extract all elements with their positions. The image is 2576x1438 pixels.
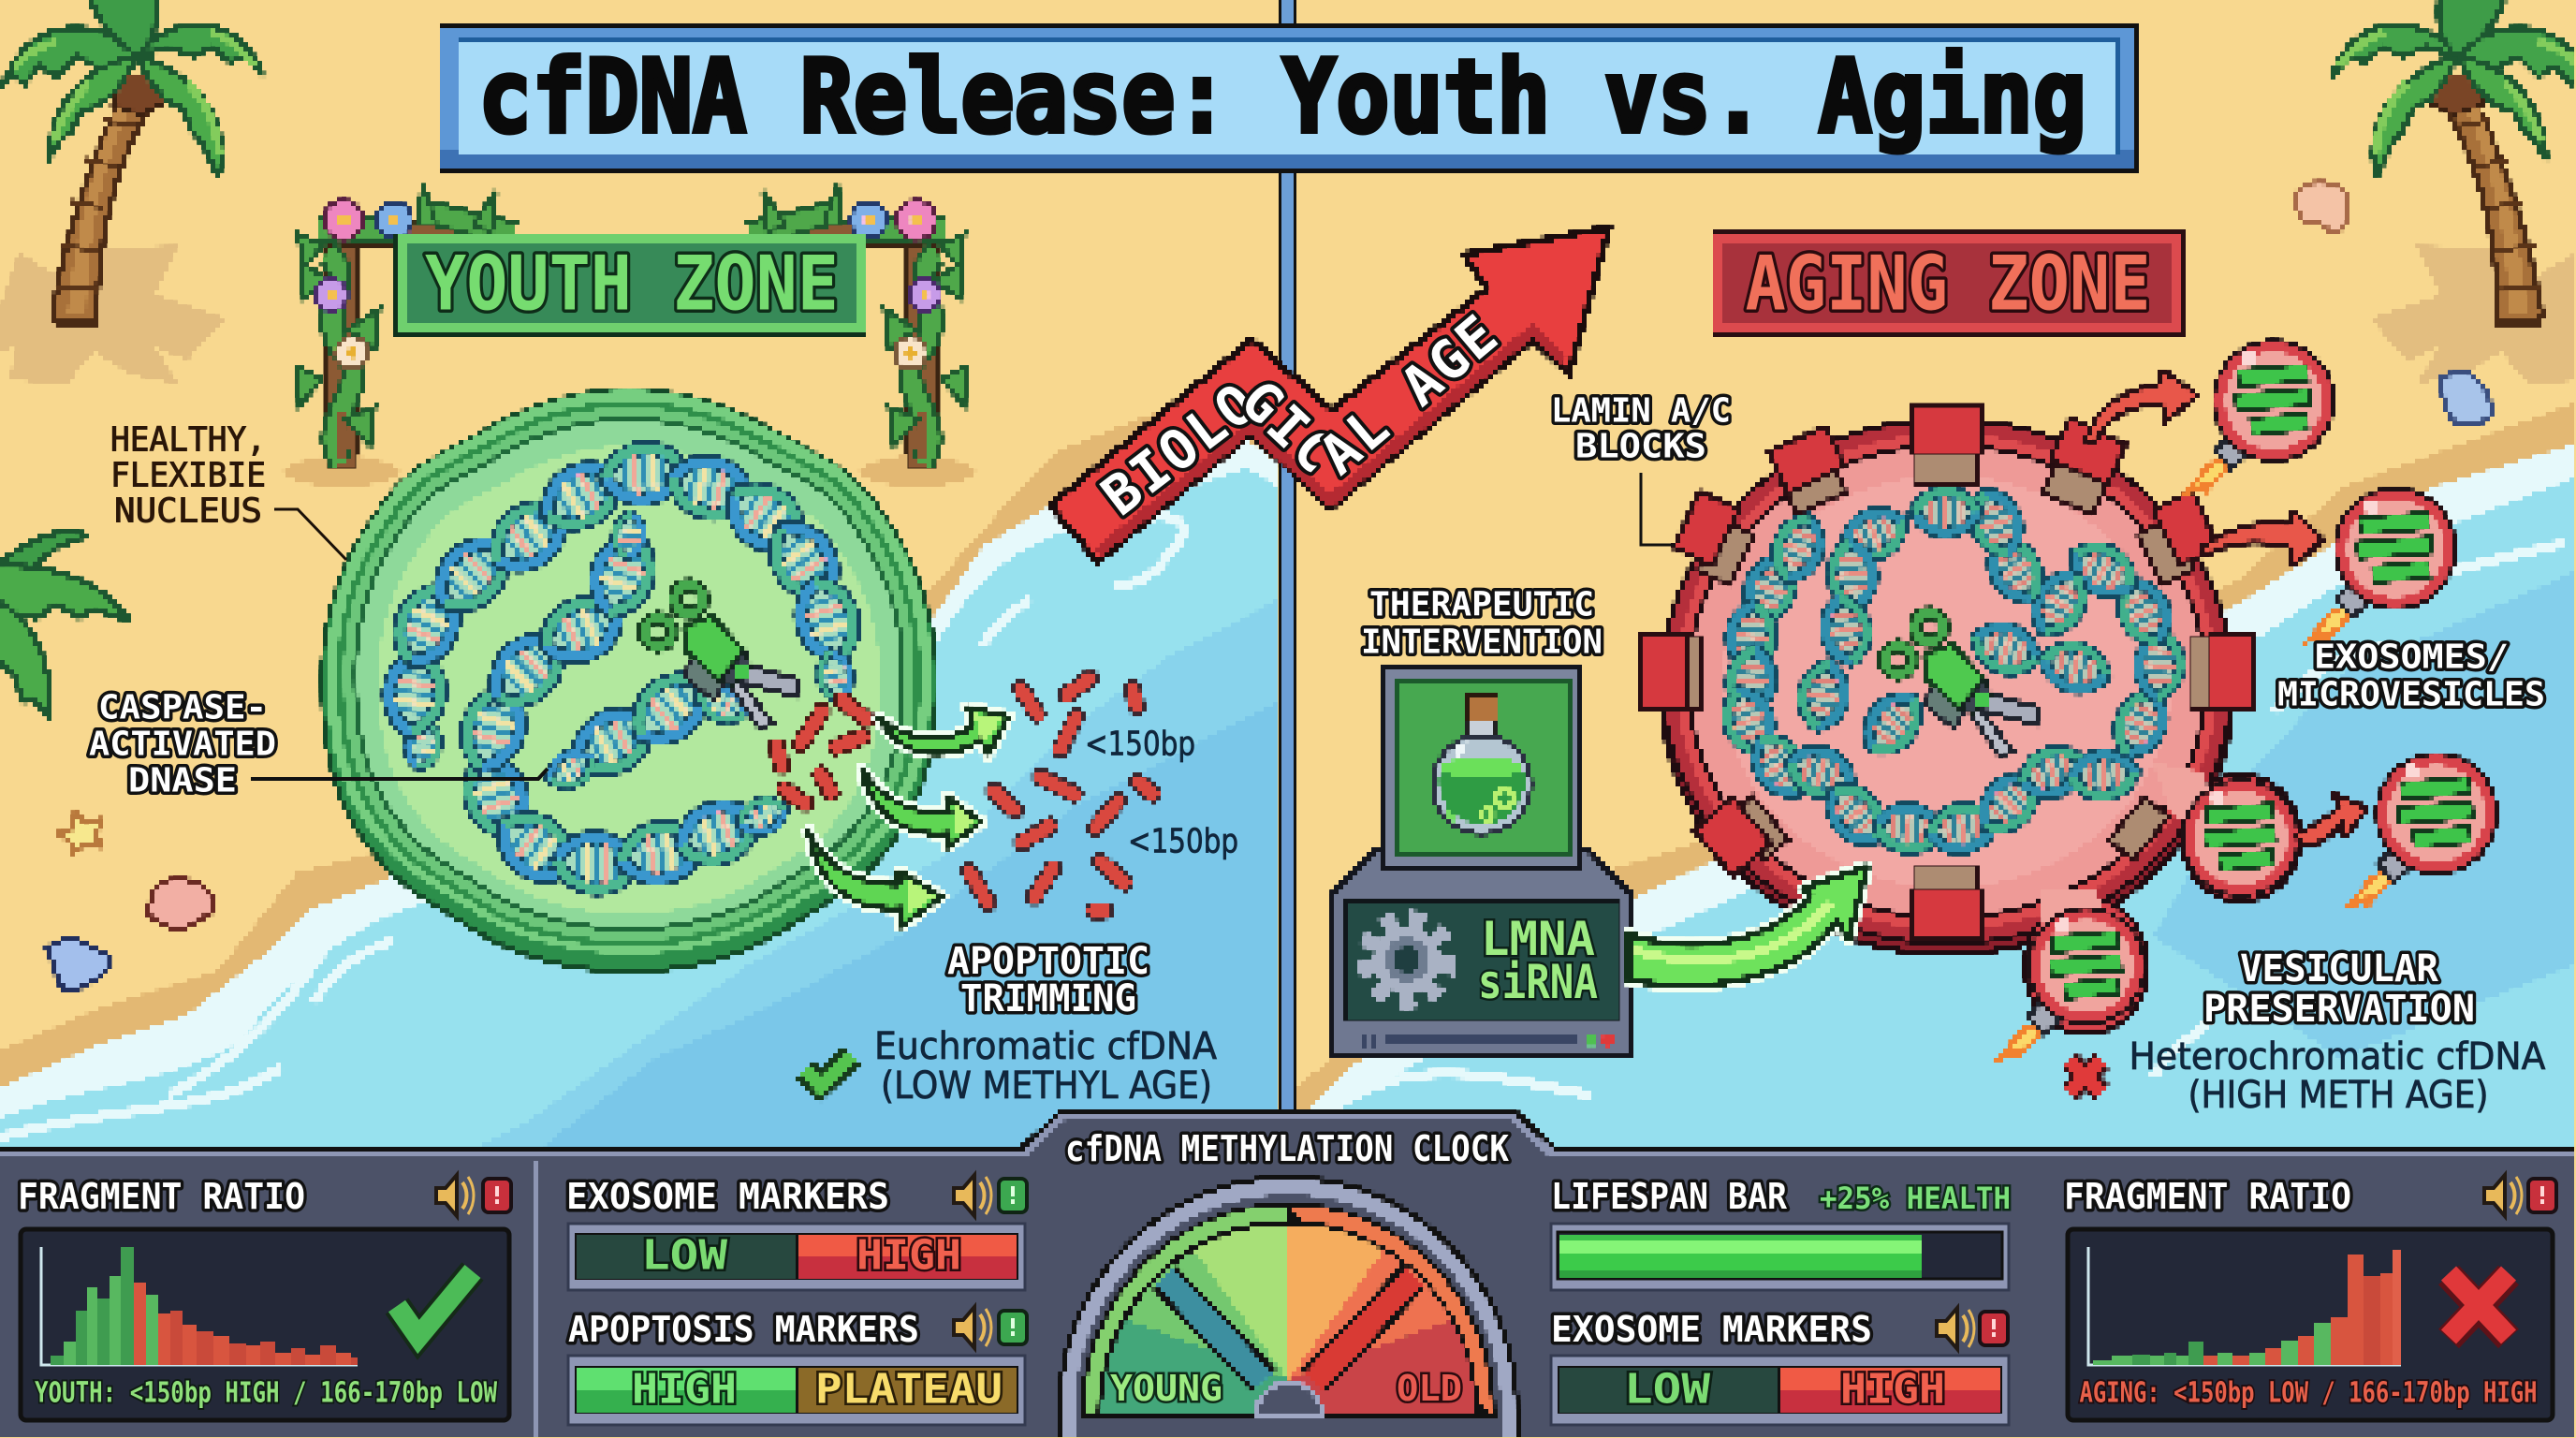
label: healthy flexible nucleus	[110, 421, 346, 560]
label: apoptotic trimming: TRIMMING	[960, 977, 1136, 1020]
right fragment ratio module	[2064, 1175, 2556, 1420]
exosome vesicle 1 with rocket flame	[2180, 339, 2335, 498]
label: therapeutic intervention	[1361, 586, 1603, 661]
dna fragments: inside nucleus	[777, 700, 866, 803]
vesicle in bud 2	[1993, 907, 2145, 1064]
arch: youth zone vines and flowers	[281, 185, 978, 487]
lmna sirna text: siRNA	[1478, 955, 1598, 1009]
shells: right beach	[2293, 183, 2491, 425]
sign: youth zone: YOUTH ZONE	[425, 240, 839, 328]
label: vesicular preservation: PRESERVATION	[2203, 988, 2475, 1031]
lmna sirna text	[1478, 912, 1598, 1009]
shells: left beach	[47, 813, 212, 990]
device: lmna sirna console	[1332, 668, 1632, 1055]
result: euchromatic cfdna	[874, 1025, 1218, 1108]
icon: red cross	[2071, 1061, 2102, 1093]
label: lamin a/c blocks: LAMIN A/C	[1551, 391, 1731, 431]
palm tree: top left	[0, 0, 262, 386]
left fragment ratio module: FRAGMENT RATIO	[18, 1176, 305, 1217]
youth histogram	[41, 1247, 358, 1365]
gauge old label: OLD	[1397, 1368, 1462, 1409]
vesicle in bud 1	[2182, 779, 2300, 897]
center divider	[1279, 0, 1296, 1153]
apoptosis markers module	[568, 1307, 1027, 1425]
label: lamin a/c blocks: BLOCKS	[1575, 427, 1706, 466]
label: caspase-activated dnase: ACTIVATED	[89, 725, 276, 764]
exosome vesicle 2 with rocket flame	[2302, 487, 2457, 646]
icon: green check	[805, 1055, 852, 1086]
palm tree: top right	[2333, 0, 2576, 386]
label: exosomes microvesicles: EXOSOMES/	[2314, 638, 2509, 676]
aging fragment screen	[2068, 1229, 2553, 1420]
sign: aging zone: AGING ZONE	[1745, 240, 2151, 328]
dna fragments: released	[969, 678, 1153, 911]
membrane ring	[1659, 419, 2235, 957]
gauge young label: YOUNG	[1110, 1368, 1222, 1409]
apoptosis markers module: PLATEAU	[815, 1365, 1003, 1414]
icon: cross	[2449, 1273, 2509, 1339]
label: caspase-activated dnase	[89, 689, 548, 800]
exosome markers module: youth: EXOSOME MARKERS	[566, 1176, 889, 1217]
result: euchromatic cfdna: Euchromatic cfDNA	[874, 1025, 1218, 1068]
result: heterochromatic cfdna: Heterochromatic cfDNA	[2129, 1035, 2546, 1078]
label: apoptotic trimming: APOPTOTIC	[947, 940, 1149, 983]
label: healthy flexible nucleus: HEALTHY,	[110, 421, 266, 459]
aging histogram	[2088, 1247, 2401, 1365]
lmna sirna text: LMNA	[1481, 912, 1595, 966]
label: healthy flexible nucleus: NUCLEUS	[114, 492, 262, 530]
result: heterochromatic cfdna	[2129, 1035, 2546, 1117]
gauge title: cfDNA METHYLATION CLOCK	[1065, 1128, 1509, 1169]
palm tree: mid left	[0, 533, 129, 718]
exosome markers module: youth: HIGH	[856, 1232, 961, 1279]
exosome markers module: youth	[566, 1175, 1027, 1290]
lamin blocks	[1642, 407, 2254, 938]
label: vesicular preservation	[2203, 947, 2475, 1031]
arrow: therapeutic effect	[1629, 866, 1867, 986]
label: healthy flexible nucleus: FLEXIBIE	[110, 457, 266, 494]
label: therapeutic intervention: INTERVENTION	[1361, 624, 1603, 661]
arrow: fragments released	[809, 707, 1008, 927]
title banner	[439, 24, 2137, 174]
label: exosomes microvesicles: MICROVESICLES	[2277, 676, 2545, 713]
label: caspase-activated dnase: CASPASE-	[98, 689, 267, 726]
lifespan bar module: LIFESPAN BAR	[1551, 1176, 1787, 1217]
dna strands: aging tangled	[1719, 487, 2182, 854]
label: exosomes microvesicles	[2277, 638, 2545, 713]
label: therapeutic intervention: THERAPEUTIC	[1369, 586, 1594, 624]
label: vesicular preservation: VESICULAR	[2240, 947, 2439, 990]
monitor: potion	[1383, 668, 1580, 870]
nucleus: aging with lamin blocks	[1642, 407, 2303, 1064]
exosome markers module: aging: HIGH	[1840, 1365, 1945, 1414]
nucleus: healthy youth	[320, 388, 938, 974]
apoptosis markers module: HIGH	[632, 1365, 737, 1414]
right fragment ratio module: FRAGMENT RATIO	[2064, 1176, 2351, 1217]
lifespan bar module	[1551, 1176, 2011, 1290]
icon: check	[397, 1271, 473, 1337]
exosome markers module: aging	[1551, 1308, 2009, 1425]
label: apoptotic trimming	[947, 940, 1149, 1020]
arrow: biological age	[1048, 225, 1614, 566]
panel: bottom dashboard	[0, 1110, 2576, 1438]
label: caspase-activated dnase: DNASE	[128, 762, 237, 800]
exosome markers module: aging: EXOSOME MARKERS	[1551, 1309, 1872, 1350]
youth fragment screen	[21, 1229, 509, 1420]
label: fragment size 2: <150bp	[1128, 822, 1238, 861]
youth caption: YOUTH: <150bp HIGH / 166-170bp LOW	[35, 1376, 498, 1410]
dna strands: youth	[386, 443, 864, 892]
exosome markers module: aging: LOW	[1624, 1365, 1711, 1414]
arrows: vesicle release	[2086, 370, 2367, 845]
result: euchromatic cfdna: (LOW METHYL AGE)	[881, 1064, 1212, 1108]
apoptosis markers module: APOPTOSIS MARKERS	[568, 1309, 919, 1350]
arrow: biological age: BIOLOGICAL AGE	[1095, 310, 1501, 520]
scissors: caspase-activated DNase	[644, 585, 798, 726]
membrane buds	[2023, 763, 2303, 1036]
label: lamin a/c blocks	[1551, 391, 1731, 545]
exosome markers module: youth: LOW	[641, 1232, 728, 1279]
title text: cfDNA Release: Youth vs. Aging	[478, 39, 2086, 155]
result: heterochromatic cfdna: (HIGH METH AGE)	[2188, 1074, 2488, 1117]
methylation clock gauge	[1057, 1128, 1519, 1438]
left fragment ratio module	[18, 1175, 511, 1420]
label: fragment size 1: <150bp	[1085, 725, 1195, 764]
gauge dial	[1057, 1175, 1519, 1438]
exosome vesicle 3 with rocket flame	[2343, 752, 2498, 911]
health gain: +25% HEALTH	[1820, 1181, 2011, 1216]
